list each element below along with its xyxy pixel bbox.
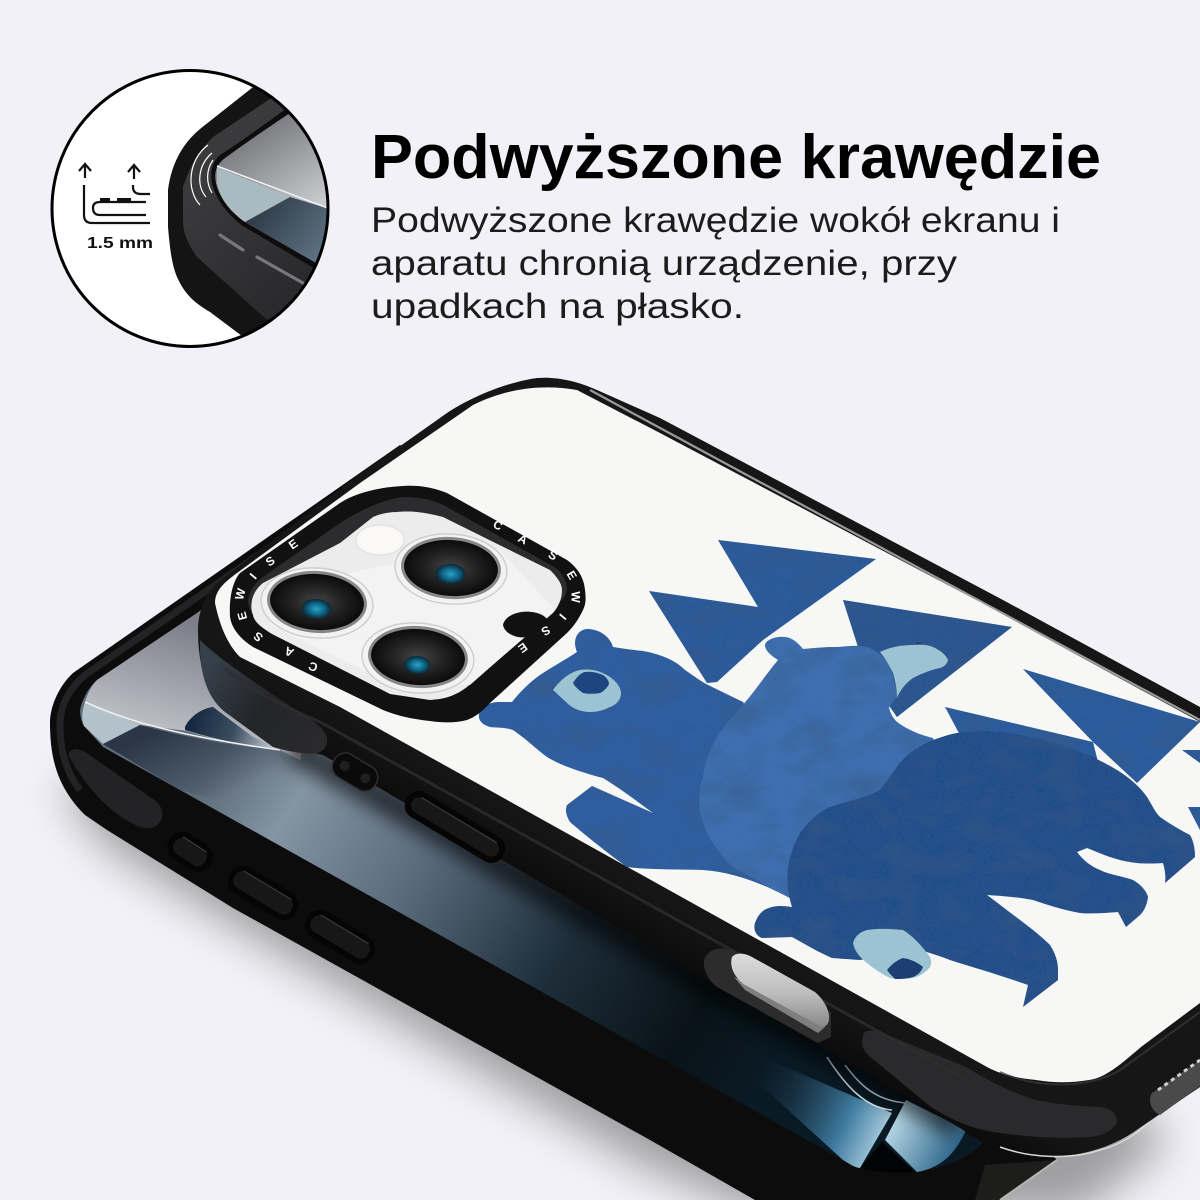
- ring lettering: S: [251, 629, 266, 645]
- ring lettering: E: [235, 610, 250, 622]
- white back panel: [215, 387, 1200, 1082]
- bear three muzzle: [853, 929, 931, 979]
- port: metal button: [704, 948, 831, 1043]
- ring lettering: S: [539, 623, 553, 639]
- lens three: [360, 619, 476, 697]
- description text: Podwyższone krawędzie wokół ekranu i: [371, 201, 1060, 240]
- ring: [230, 486, 586, 722]
- illustration: bear one: [479, 629, 800, 905]
- side buttons: [162, 826, 218, 878]
- top phone shadow on screen: [290, 745, 960, 1125]
- right edge speaker grill: [1150, 1060, 1200, 1115]
- ring lettering: [232, 517, 583, 675]
- inset circle: raised edge close-up: [52, 70, 340, 346]
- ring lettering: W: [569, 591, 583, 603]
- ring lettering: I: [247, 570, 260, 582]
- ring lettering: A: [282, 643, 296, 660]
- window: [251, 512, 562, 700]
- description text: aparatu chronią urządzenie, przy: [371, 244, 958, 283]
- phone shadow: [60, 700, 1170, 1200]
- lens two: [393, 530, 509, 608]
- icon label: 1.5 mm: 1.5 mm: [87, 235, 153, 252]
- ring lettering: A: [516, 531, 530, 548]
- camera bump: [230, 486, 586, 722]
- ring lettering: S: [546, 547, 560, 563]
- icon: 1.5 mm raised edge diagram: [79, 164, 150, 223]
- inner wall: [248, 497, 567, 700]
- ring lettering: I: [556, 611, 569, 623]
- bear two muzzle: [915, 642, 940, 660]
- bear eye: [553, 669, 621, 712]
- carbon patches: [200, 640, 327, 754]
- flash: [356, 525, 404, 555]
- title: Podwyższone krawędzie: [371, 123, 1101, 192]
- description text: [371, 201, 1060, 326]
- ring lettering: E: [286, 536, 300, 552]
- ring lettering: C: [306, 658, 320, 675]
- side volume buttons: [328, 748, 382, 796]
- carbon patch: [68, 749, 162, 828]
- ring lettering: E: [564, 568, 580, 582]
- ring lettering: S: [263, 553, 277, 569]
- ring lettering: C: [491, 517, 505, 534]
- illustration: triangles: [649, 540, 1200, 830]
- top phone: back with case: [198, 378, 1200, 1157]
- screen: [80, 490, 983, 1173]
- ring lettering: W: [232, 586, 249, 601]
- ring lettering: E: [516, 640, 530, 656]
- silver rim line: [590, 390, 1200, 720]
- screen reflection shards: [700, 1030, 892, 1168]
- illustration: bear two: [699, 637, 960, 900]
- description text: upadkach na płasko.: [371, 287, 744, 326]
- microphone hole: [503, 612, 548, 637]
- lens one: [259, 564, 375, 642]
- lower phone: front with screen: [50, 445, 1057, 1200]
- illustration: bear three: [754, 731, 1195, 1007]
